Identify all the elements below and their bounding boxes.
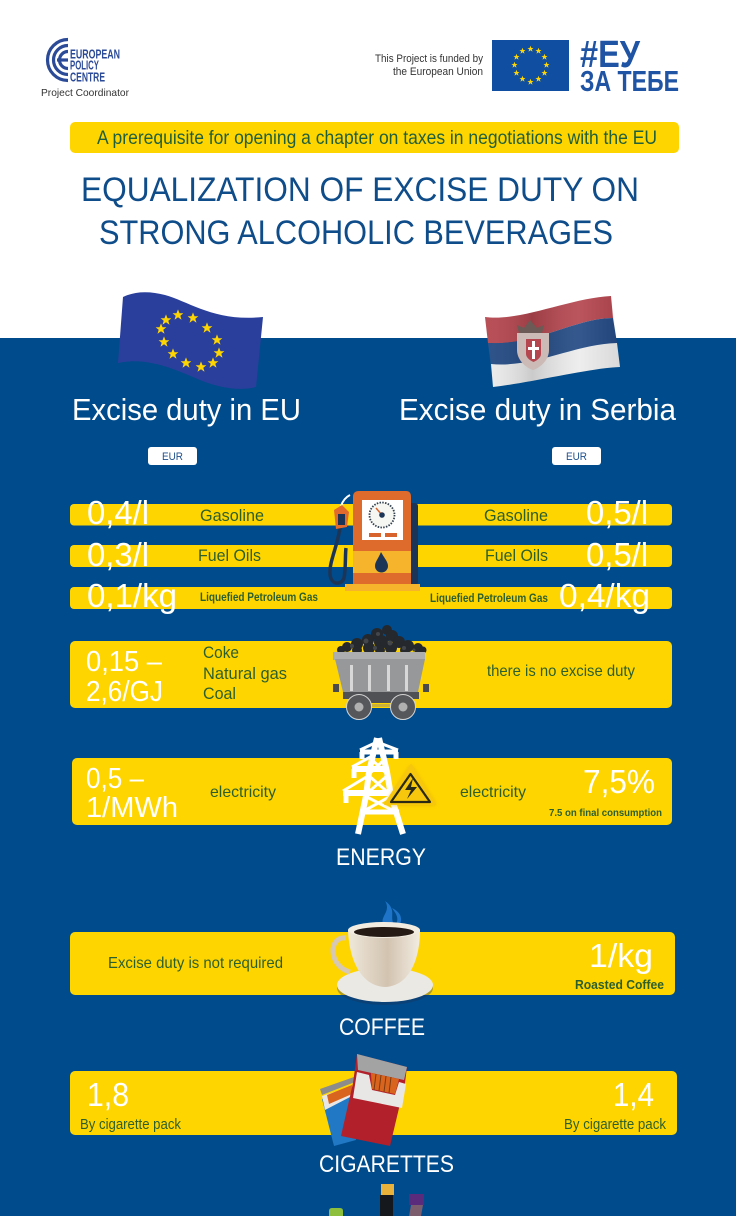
row: fuel oils: Fuel Oils <box>198 546 261 565</box>
subtitle bar: A prerequisite for opening a chapter on taxes in negotiations with the EU <box>97 127 657 149</box>
label: coffee: COFFEE <box>339 1014 425 1041</box>
icon: coal cart <box>333 625 429 720</box>
row: gasoline: 0,5/l <box>586 494 648 531</box>
funding note <box>375 53 483 78</box>
row: gasoline: Gasoline <box>200 506 264 525</box>
blue background panel <box>0 338 736 1216</box>
row: gasoline: Gasoline <box>484 506 548 525</box>
row: electricity: electricity <box>210 784 276 801</box>
row: cigarettes: By cigarette pack <box>564 1116 666 1133</box>
row: fuel oils: 0,5/l <box>586 536 648 573</box>
row: fuel oils: 0,3/l <box>87 536 149 573</box>
title <box>81 171 639 252</box>
logo: European Policy Centre: POLICY <box>70 58 99 72</box>
column heading: Serbia: Excise duty in Serbia <box>399 392 677 427</box>
row: liquefied petroleum gas: Liquefied Petroleum Gas <box>430 593 548 605</box>
row: liquefied petroleum gas <box>70 577 672 614</box>
subtitle bar <box>70 122 679 153</box>
row: coke, natural gas, coal: Natural gas <box>203 664 287 683</box>
icon: bottles <box>329 1184 424 1216</box>
logo: European Policy Centre <box>41 40 129 99</box>
unit label: EUR left: EUR <box>162 451 183 463</box>
row: fuel oils <box>70 536 672 573</box>
row: electricity <box>72 758 672 825</box>
row: gasoline: 0,4/l <box>87 494 149 531</box>
row: electricity: electricity <box>460 784 526 801</box>
icon: coffee cup <box>333 901 433 1005</box>
logo: European Policy Centre: Project Coordinator <box>41 87 129 99</box>
row: liquefied petroleum gas: Liquefied Petroleum Gas <box>200 592 318 604</box>
campaign hashtag: ЗА ТЕБЕ <box>580 66 679 98</box>
column heading: EU: Excise duty in EU <box>72 392 301 427</box>
logo: European Policy Centre: EUROPEAN <box>70 48 120 62</box>
row: coke, natural gas, coal: Coke <box>203 643 239 662</box>
row: electricity: 7.5 on final consumption <box>549 807 662 819</box>
row: coffee: Roasted Coffee <box>575 977 664 992</box>
row: coke, natural gas, coal: Coal <box>203 684 236 703</box>
icon: transmission tower with warning sign <box>343 738 436 834</box>
row: cigarettes: By cigarette pack <box>80 1116 181 1133</box>
row: coffee <box>70 932 675 995</box>
row: fuel oils: Fuel Oils <box>485 546 548 565</box>
title: STRONG ALCOHOLIC BEVERAGES <box>99 214 613 252</box>
row: cigarettes: 1,4 <box>613 1076 654 1113</box>
row: gasoline <box>70 494 672 531</box>
unit label: EUR left <box>148 447 197 465</box>
row: coffee: 1/kg <box>589 937 653 974</box>
label: cigarettes: CIGARETTES <box>319 1151 454 1178</box>
title: EQUALIZATION OF EXCISE DUTY ON <box>81 171 639 209</box>
funding note: the European Union <box>393 66 483 78</box>
row: liquefied petroleum gas: 0,1/kg <box>87 577 177 614</box>
campaign hashtag: #ЕУ <box>580 34 640 76</box>
row: electricity: 0,5 – <box>86 763 145 795</box>
row: coke, natural gas, coal: 2,6/GJ <box>86 676 163 708</box>
icon: EU flag small <box>492 40 569 91</box>
row: cigarettes: 1,8 <box>87 1076 129 1113</box>
row: coke, natural gas, coal: there is no excise duty <box>487 663 635 680</box>
row: liquefied petroleum gas: 0,4/kg <box>559 577 650 614</box>
logo: European Policy Centre: CENTRE <box>70 70 105 84</box>
unit label: EUR right <box>552 447 601 465</box>
campaign hashtag <box>580 34 679 98</box>
row: coffee: Excise duty is not required <box>108 955 283 972</box>
row: electricity: 7,5% <box>583 763 655 800</box>
icon: waving Serbian flag <box>485 296 620 387</box>
row: electricity: 1/MWh <box>86 792 178 824</box>
row: coke, natural gas, coal <box>70 641 672 708</box>
icon: cigarette packs <box>320 1054 407 1146</box>
row: coke, natural gas, coal: 0,15 – <box>86 646 163 678</box>
label: energy: ENERGY <box>336 844 426 871</box>
row: cigarettes <box>70 1071 677 1135</box>
icon: fuel pump <box>330 491 420 591</box>
funding note: This Project is funded by <box>375 53 483 65</box>
unit label: EUR right: EUR <box>566 451 587 463</box>
icon: waving EU flag <box>118 292 263 389</box>
